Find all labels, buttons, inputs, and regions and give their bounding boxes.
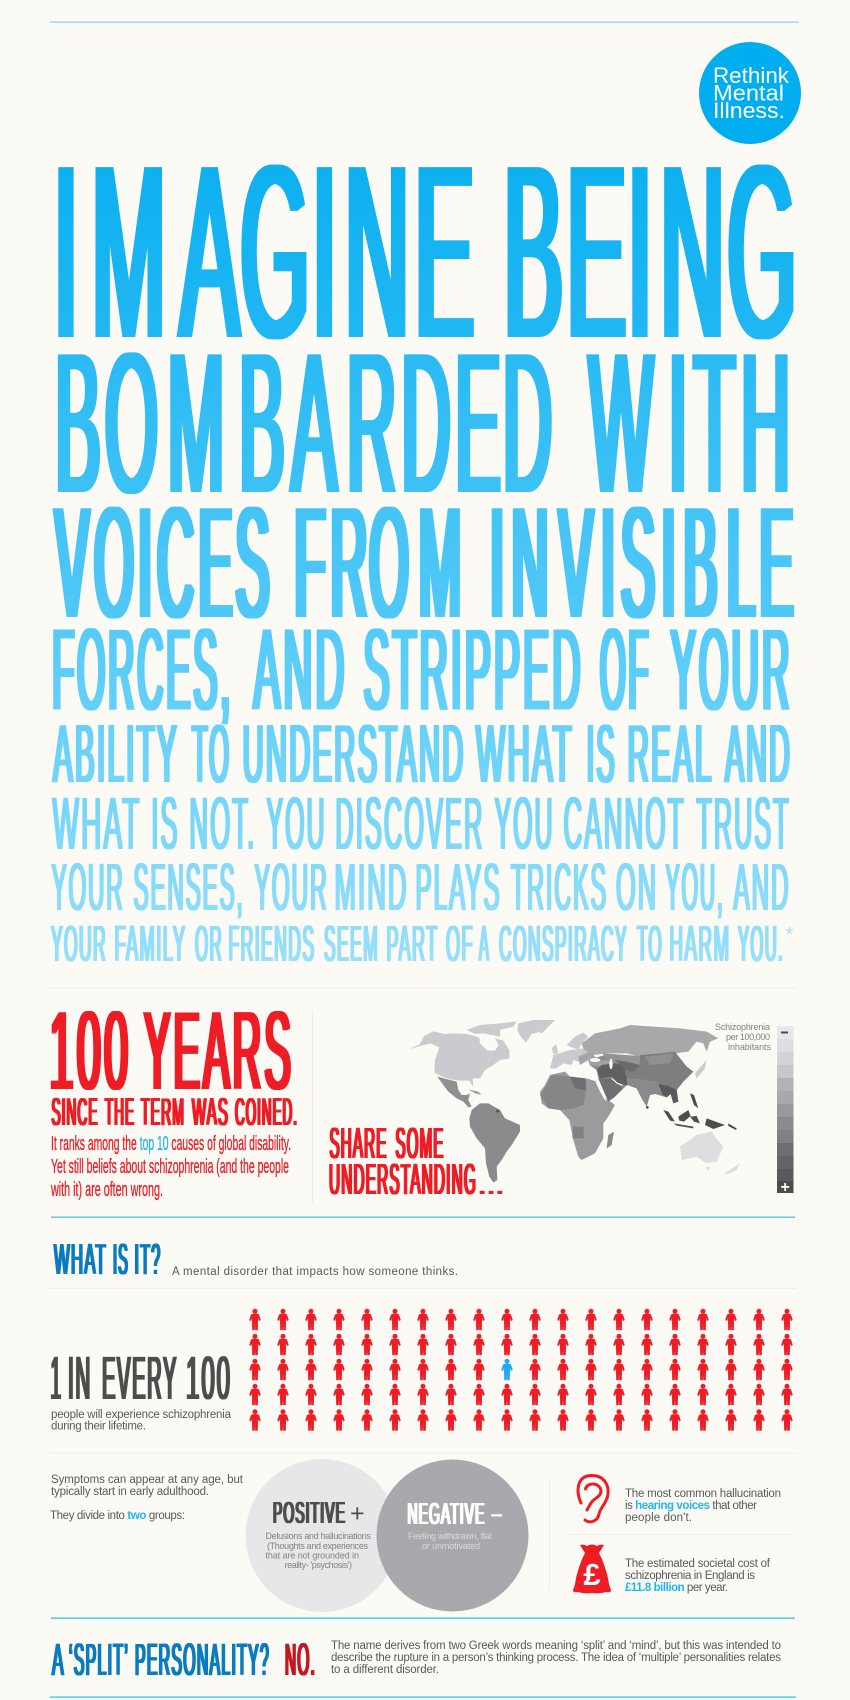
asterisk: * — [786, 924, 794, 946]
body text: disability: with it) are often wrong. — [50, 1179, 163, 1201]
fact: hearing voices: is hearing voices that other — [625, 1500, 757, 1512]
fact: hearing voices — [625, 1488, 781, 1524]
headline line 3: INVISIBLE — [490, 474, 793, 651]
headline line 6: YOU — [494, 782, 554, 865]
headline line 6: IS — [151, 782, 179, 865]
world map — [408, 1020, 740, 1183]
icon: money bag: £ — [583, 1557, 601, 1592]
headline line 5: TO — [192, 707, 231, 800]
map legend: inhabitants — [728, 1042, 772, 1052]
fact: hearing voices: people don't. — [625, 1512, 692, 1524]
stat: 1 in every 100: people will experience schizophrenia — [51, 1409, 232, 1421]
body text: disability: Yet still beliefs about schizophrenia (and the people — [51, 1156, 289, 1178]
subheading: since the term was coined: WAS — [192, 1091, 229, 1134]
logo: Rethink Mental Illness — [699, 42, 801, 144]
headline line 3: FROM — [294, 474, 461, 651]
definition text: A mental disorder that impacts how someone thinks. — [172, 1266, 458, 1278]
stat: 1 in every 100: EVERY — [102, 1344, 178, 1412]
map: europe, africa, asia, oceania — [540, 1020, 740, 1174]
symptoms intro text: They divide into two groups: — [50, 1510, 185, 1522]
headline statement — [51, 115, 797, 972]
headline line 7: MIND — [334, 850, 408, 925]
panel: 100 years — [50, 989, 298, 1201]
circle: negative symptoms: – — [490, 1502, 503, 1526]
headline line 6 — [52, 782, 790, 865]
logo: Rethink Mental Illness: Rethink — [713, 63, 790, 88]
icon: money bag — [573, 1544, 611, 1593]
circle: negative symptoms: NEGATIVE — [408, 1497, 486, 1531]
headline line 1 — [54, 115, 797, 390]
headline line 4: FORCES, — [52, 604, 233, 734]
headline line 6: NOT. — [189, 782, 256, 865]
headline line 6: YOU — [266, 782, 326, 865]
logo: Rethink Mental Illness: Mental — [713, 80, 784, 106]
symptoms intro text — [50, 1474, 244, 1522]
map legend: Schizophrenia — [715, 1022, 770, 1032]
map legend: + — [781, 1179, 790, 1196]
headline line 2: WITH — [589, 311, 790, 535]
headline line 8: PART — [386, 915, 438, 972]
headline line 1: IMAGINE — [54, 115, 474, 390]
body text: disability: It ranks among the top 10 causes of global disability. — [51, 1133, 291, 1155]
map legend: per 100,000 — [726, 1032, 770, 1042]
headline line 5: WHAT — [476, 707, 574, 800]
headline line 8: FRIENDS — [228, 915, 316, 972]
headline line 2 — [55, 311, 790, 535]
headline line 4: OF — [600, 604, 651, 734]
headline line 7: YOUR — [254, 850, 328, 925]
subheading: since the term was coined: THE — [105, 1091, 135, 1134]
headline line 8: FAMILY — [114, 915, 186, 972]
headline line 7 — [52, 850, 790, 925]
headline line 5: ABILITY — [53, 707, 179, 800]
text: IT? — [134, 1235, 162, 1284]
fact: hearing voices: The most common hallucination — [625, 1488, 781, 1500]
text: UNDERSTANDING — [329, 1155, 477, 1204]
headline line 8: HARM — [670, 915, 730, 972]
heading: a split personality: A — [52, 1634, 65, 1685]
call to action: share some understanding — [329, 1119, 504, 1204]
icon: ear — [578, 1476, 608, 1522]
headline line 6: WHAT — [52, 782, 142, 865]
fact: societal cost: The estimated societal cost of — [625, 1558, 771, 1570]
headline line 2: BOMBARDED — [55, 311, 552, 535]
headline line 6: DISCOVER — [335, 782, 484, 865]
paragraph: name origin: to a different disorder. — [331, 1664, 439, 1676]
circle: negative symptoms: or unmotivated — [422, 1541, 480, 1551]
fact: societal cost: schizophrenia in England is — [625, 1570, 755, 1582]
headline line 7: YOU, — [666, 850, 724, 925]
heading: what is it: WHAT — [54, 1235, 107, 1284]
subheading: since the term was coined — [52, 1091, 298, 1134]
call to action: share some understanding: SOME — [396, 1119, 444, 1168]
headline line 5 — [53, 707, 792, 800]
big stat: 100 years: 100 — [50, 989, 132, 1113]
heading: a split personality: ‘SPLIT’ — [69, 1634, 129, 1685]
headline line 8: A — [479, 915, 490, 972]
circle: positive symptoms: Delusions and hallucinations — [266, 1531, 372, 1541]
pictogram: 100 people, one highlighted — [250, 1309, 792, 1430]
text: YEARS — [144, 989, 294, 1113]
headline line 7: PLAYS — [416, 850, 502, 925]
headline line 8: TO — [637, 915, 663, 972]
headline line 7: YOUR — [52, 850, 124, 925]
headline line 7: TRICKS — [511, 850, 608, 925]
symptoms intro text: typically start in early adulthood. — [51, 1486, 209, 1498]
call to action: share some understanding: . . . — [478, 1168, 504, 1201]
body text: disability — [50, 1133, 291, 1201]
fact: societal cost — [625, 1558, 771, 1594]
circle: positive symptoms: (Thoughts and experiences — [267, 1541, 368, 1551]
headline line 8: OR — [195, 915, 223, 972]
headline line 7: ON — [616, 850, 658, 925]
paragraph: name origin: The name derives from two Greek words meaning ‘split’ and ‘mind’, but this was intended to — [331, 1640, 781, 1652]
subheading: since the term was coined: TERM — [141, 1091, 185, 1134]
headline line 8: YOUR — [51, 915, 107, 972]
circle: positive symptoms: + — [350, 1500, 365, 1528]
fact: societal cost: £11.8 billion per year. — [625, 1582, 728, 1594]
circle: negative symptoms: Feeling withdrawn, flat — [408, 1531, 492, 1541]
paragraph: name origin: describe the rupture in a person’s thinking process. The idea of ‘multiple’ personalities relates — [331, 1652, 781, 1664]
circle: positive symptoms — [246, 1459, 398, 1612]
circle: positive symptoms: that are not grounded in — [266, 1550, 359, 1560]
subheading: since the term was coined: SINCE — [52, 1091, 98, 1134]
paragraph: name origin — [331, 1640, 781, 1676]
headline line 1: BEING — [504, 115, 797, 390]
headline line 3: VOICES — [55, 474, 269, 651]
stat: 1 in every 100: during their lifetime. — [51, 1420, 146, 1432]
text: COINED. — [235, 1091, 298, 1134]
text: PERSONALITY? — [135, 1634, 270, 1685]
circle: positive symptoms: POSITIVE — [273, 1496, 346, 1530]
heading: what is it: IS — [113, 1235, 129, 1284]
top rule — [50, 22, 799, 23]
headline line 7: SENSES, — [134, 850, 244, 925]
circle: negative symptoms — [376, 1460, 528, 1612]
text: 100 — [186, 1344, 232, 1412]
headline line 8: SEEM — [324, 915, 379, 972]
map legend — [715, 1022, 794, 1196]
logo: Rethink Mental Illness: Illness. — [713, 98, 785, 123]
text: NO. — [285, 1634, 316, 1685]
stat: 1 in every 100: IN — [68, 1344, 92, 1412]
headline line 4: AND — [254, 604, 348, 734]
symptoms intro text: Symptoms can appear at any age, but — [51, 1474, 244, 1486]
stat: 1 in every 100: 1 — [50, 1344, 62, 1412]
stat: 1 in every 100 — [50, 1344, 232, 1432]
headline line 8: OF — [446, 915, 474, 972]
call to action: share some understanding: SHARE — [330, 1119, 388, 1168]
map: americas and arctic — [408, 1020, 555, 1183]
headline line 5: IS — [587, 707, 617, 800]
headline line 8 — [51, 915, 784, 972]
headline line 3 — [55, 474, 793, 651]
circle: positive symptoms: reality- 'psychosis') — [284, 1560, 352, 1570]
